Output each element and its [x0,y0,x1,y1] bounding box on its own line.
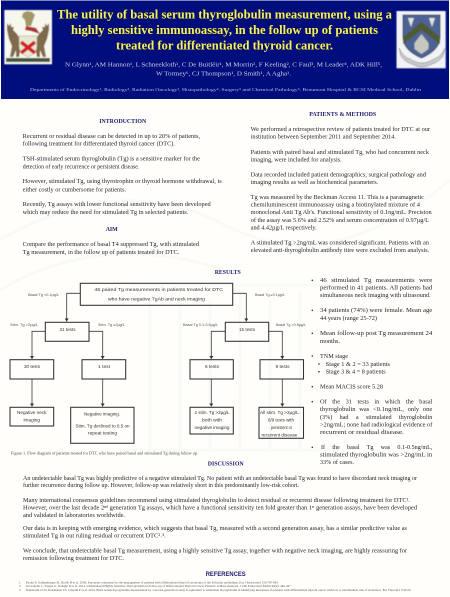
title: The utility of basal serum thyroglobulin measurement, using a [57,7,392,22]
flow box: 30 tests [10,360,54,379]
panel: references: 2. [19,584,22,588]
panel: discussion: An undetectable basal Tg was highly predictive of a negative stimulated Tg. No patient with an undetectable basal Tg was found to have discordant neck imaging or [23,475,418,482]
flow box: all stim tg: recurrent disease [262,432,298,438]
bullet: basal 0.1-0.5 [312,444,433,466]
flow box: all stim tg: All stim. Tg >2µg/L. [260,410,300,416]
bullet: demographics [312,307,433,322]
panel: introduction: However, stimulated Tg, using thyrotrophin or thyroid hormone withdrawal, is [23,178,222,185]
affiliations: Departments of Endocrinology¹, Radiology², Radiation Oncology³, Histopathology⁴, Surgery⁵ and Chemical Pathology⁶, Beaumont Hospital & RCSI Medical School, Dublin [30,87,422,93]
panel: references: Pacini F, Schlumberger M, Dralle H et al. 2006. European consensus for the management of patients with differentiated thyroid carcinoma of the follicular epithelium. Eur J Endocrinol 154:787-803 [26,581,279,586]
panel: discussion: remission following treatment for DTC. [23,555,124,562]
flow box: negative neck imaging: Negative neck [17,410,47,416]
panel: introduction: which may reduce the need for stimulated Tg in selected patients. [23,209,189,216]
title: highly sensitive immunoassay, in the follow up of patients [71,22,378,37]
bullet: measurements: performed in 41 patients. All patients had [320,285,433,292]
bullet: MACIS score: Mean MACIS score 5.28 [320,384,383,391]
flow box: 6 tests [190,360,233,379]
bullet: 31 tests: >2ng/mL; none had radiological evidence of [320,422,433,429]
panel: discussion: and validated in laboratories worldwide. [23,512,125,519]
panel: introduction: Recently, Tg assays with lower functional sensitivity have been developed [23,201,212,208]
authors: N Glynn¹, AM Hannon¹, L Schneekloth¹, C De Buitléir¹, M Morrin², F Keeling², C Faul³, M Leader⁴, ADK Hill⁵, [65,62,383,69]
bullet: measurements [312,277,433,299]
panel: patients and methods: chemiluminescent immunoassay using a biotinylated mixture of 4 [251,202,421,208]
flow box: 31 tests: 31 tests [60,327,76,333]
heading: results: RESULTS [215,269,241,276]
panel: patients and methods: imaging, were included for analysis. [251,156,342,164]
bullet: 31 tests: recurrent or residual disease. [320,429,404,436]
flow box: 2 stim tg: 2 stim. Tg >2µg/L [194,410,230,416]
title [57,7,392,52]
heading: patients and methods: PATIENTS & METHODS [309,111,377,118]
icon: left coat of arms [4,10,52,64]
panel: patients and methods: We performed a retrospective review of patients treated for DTC at our [251,126,431,133]
panel: introduction: following treatment for differentiated thyroid cancer (DTC). [23,141,175,148]
flow box: 46 paired measurements [80,283,233,305]
panel: discussion: We conclude, that undetectable basal Tg measurement, using a highly sensitive Tg assay, together with negative neck imaging, are highly reassuring for [23,548,408,555]
panel: patients and methods: Data recorded included patient demographics, surgical pathology and [251,172,427,179]
bullet: 31 tests: Of the 31 tests in which the basal [320,399,433,406]
bullet: follow-up: Mean follow-up post Tg measurement 24 [320,330,433,337]
title: treated for differentiated thyroid cancer. [116,37,333,52]
heading: discussion: DISCUSSION [208,461,244,468]
flow branch labels: Basal Tg <0.1µg/L [28,293,59,297]
bullet: follow-up [312,330,433,345]
flow box: 1 test: 1 test [98,364,111,370]
flow box: negative imaging, repeat testing: repeat testing [88,430,117,436]
flow box: negative imaging, repeat testing [71,407,134,443]
panel: discussion: further recurrence during follow up. However, follow-up was relatively short in this predominantly low-risk cohort. [23,482,299,489]
panel: patients and methods: A stimulated Tg >2ng/mL was considered significant. Patients with an [251,240,430,247]
flow box: 15 tests: 15 tests [239,327,256,333]
panel: patients and methods [251,111,433,254]
panel: patients and methods: institution between September 2011 and September 2014. [251,134,396,140]
flow box: negative imaging, repeat testing: Negative imaging. [84,412,120,418]
flow branch labels: Basal Tg ≥0.1µg/L [255,293,285,297]
panel: patients and methods: Tg was measured by the Beckman Access 11. This is a paramagnetic [251,194,424,201]
bullet: TNM stage [312,353,391,376]
flow box: 46 paired measurements: who have negative TgAb and neck imaging [108,296,205,302]
flow box: all stim tg: 6/9 tests with [268,418,294,424]
panel: discussion: Our data is in keeping with emerging evidence, which suggests that basal Tg, measured with a second generation assay, has a similar predictive value as [23,525,408,532]
authors: W Tormey⁶, CJ Thompson¹, D Smith¹, A Agha¹. [156,71,292,78]
panel: patients and methods: monoclonal Anti Tg Ab's. Functional sensitivity of 0.1ng/mL. Precision [251,209,433,216]
flow box: 2 stim tg: both with [202,418,222,424]
figure caption: Figure 1. Flow diagram of patients treated for DTC who have paired basal and stimulated Tg during follow up. [11,452,198,456]
flow box: 6 tests: 6 tests [205,364,220,370]
flow box: all stim tg: persistent or [271,425,292,431]
panel: discussion: Many international consensus guidelines recommend using stimulated thyroglobulin to detect residual or recurrent disease following treatment for DTC¹. [23,497,410,504]
panel: introduction: detection of early recurrence or persistent disease. [23,163,140,170]
flow branch labels: Basal Tg 0.1-0.5µg/L [183,323,218,327]
authors [65,62,383,78]
flow box: 46 paired measurements: 46 paired Tg measurements in patients treated for DTC [94,287,223,293]
flow box: 15 tests [225,322,269,341]
flow box: negative neck imaging [10,407,54,426]
flow box: 2 stim tg [190,407,233,434]
bullet: TNM stage: Stage 1 & 2 = 33 patients [326,361,391,368]
flow branch labels [10,293,306,327]
icon: right shield crest [396,11,446,68]
panel: patients and methods: imaging results as well as biochemical parameters. [251,179,379,186]
bullet: basal 0.1-0.5: If the basal Tg was 0.1-0.5ng/mL, [321,444,433,451]
flow diagram [10,283,306,443]
bullet: 31 tests: thyroglobulin was <0.1ng/mL, only one [320,406,433,413]
panel: references: 1. [19,581,22,585]
flow box: all stim tg [259,407,304,438]
panel: aim: Tg measurement, in the follow up of patients treated for DTC. [23,249,180,256]
header banner [1,0,449,99]
panel: references: Nakabashi CCD, Kasamatsu TS, Crispim F et al. 2014. Basal serum thyroglobulin measurement by a second-generation assay is equivalent to stimulated thyroglobulin in identifying metastases in patients with differentiated thyroid cancer with low or intermediate risk of recurrence. Eur Thyroid J 3:43-50 [26,588,411,593]
panel: patients and methods: and 4.42µg/L respectively. [251,225,317,232]
flow box: 30 tests: 30 tests [24,364,41,370]
bullet: demographics: 44 years (range 25-72) [320,315,377,322]
panel: introduction: Recurrent or residual disease can be detected in up to 20% of patients, [23,133,200,140]
results bullet list [312,277,433,466]
panel: discussion [23,461,418,562]
flow branch labels: Stim. Tg <2µg/L [10,323,38,327]
panel: patients and methods: Patients with paired basal and stimulated Tg, who had concurrent neck [251,149,430,156]
panel: discussion: However, over the last decade 2ⁿᵈ generation Tg assays, which have a functional sensitivity ten fold greater than 1ˢᵗ generation assays, have been developed [23,505,418,512]
panel: introduction: either costly or cumbersome for patients. [23,186,126,193]
panel: patients and methods: of the assay was 5.6% and 2.52% and serum concentration of 0.97µg/L [251,217,429,224]
bullet: measurements: simultaneous neck imaging with ultrasound. [320,292,431,299]
bullet: 31 tests: (3%) had a stimulated thyroglobulin [320,414,433,421]
panel: references: 3. [19,588,22,592]
panel: references [19,572,411,593]
heading: aim: AIM [106,226,118,233]
flow box: negative neck imaging: imaging [24,418,40,424]
bullet: TNM stage: TNM stage [320,353,348,360]
bullet: demographics: 34 patients (74%) were female. Mean age [320,307,433,314]
bullet: basal 0.1-0.5: 33% of cases. [320,459,354,466]
flow box: 9 tests [260,360,304,379]
bullet: 31 tests [312,399,433,436]
flow box: 2 stim tg: negative imaging [194,425,230,431]
flow branch labels: Stim. Tg ≥2µg/L [98,323,125,327]
flow box: negative imaging, repeat testing: Stim. Tg declined to 0.5 on [76,424,130,430]
panel: references: Giovanella L, Treglia G, Sadeghi R et al. 2014. Unstimulated Highly Sensitive Thyroglobulin in Follow-up of Differentiated Thyroid Cancer Patients: A Meta-Analysis. J Clin Endocrinol Metab 99(2): 440-447 [26,584,291,589]
bullet: TNM stage: Stage 3 & 4 = 8 patients [326,369,386,376]
flow box: 1 test [82,360,126,379]
panel: discussion: stimulated Tg in out ruling residual or recurrent DTC²˒³. [23,533,166,540]
bullet: basal 0.1-0.5: stimulated thyroglobulin was >2ng/mL in [320,452,433,459]
panel: aim: Compare the performance of basal T4 suppressed Tg, with stimulated [23,241,200,248]
bullet: measurements: 46 stimulated Tg measurements were [320,277,433,284]
bullet: follow-up: months. [320,338,340,345]
panel: patients and methods: elevated anti-thyroglobulin antibody titre were excluded from analysis. [251,247,430,254]
heading: introduction: INTRODUCTION [99,118,147,125]
flow box: 9 tests: 9 tests [276,364,290,370]
panel: introduction: TSH-stimulated serum thyroglobulin (Tg) is a sensitive marker for the [23,156,200,163]
heading: references: REFERENCES [206,572,246,578]
panel: introduction [23,118,222,216]
flow box: 31 tests [45,322,89,341]
flow branch labels: Basal Tg >0.5µg/L [276,323,306,327]
panel: aim [23,226,200,256]
